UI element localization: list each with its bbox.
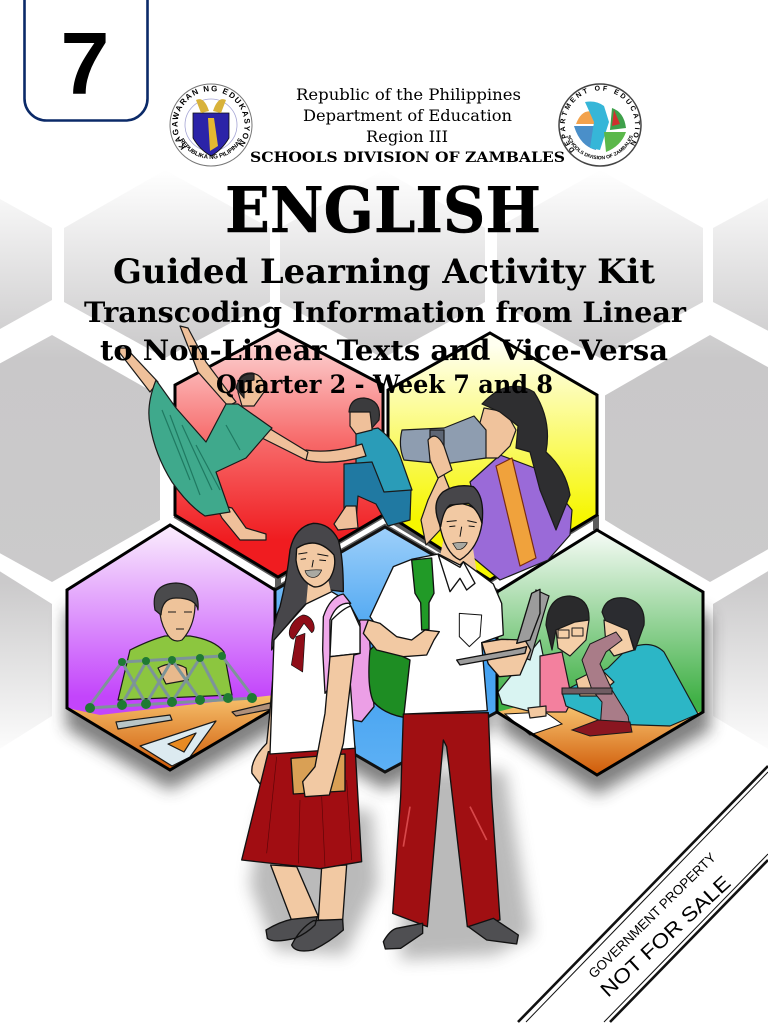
hair (272, 523, 343, 650)
shoes (383, 918, 518, 949)
face (296, 543, 335, 587)
grade number: 7 (61, 14, 109, 113)
ribbon (289, 615, 314, 672)
skirt (242, 746, 362, 869)
folder (291, 754, 345, 794)
header text: agency lines: SCHOOLS DIVISION OF ZAMBALES (250, 150, 565, 166)
dark connector lines (175, 515, 597, 715)
boy with bridge model (85, 583, 272, 766)
sleeve (330, 606, 360, 657)
shoes (266, 917, 343, 951)
grade level tab (24, 0, 148, 120)
banner large text: NOT FOR SALE (597, 872, 735, 1002)
hexagon: blue centre (275, 527, 497, 772)
smile (305, 570, 322, 577)
girl with glasses (498, 596, 589, 718)
blouse (270, 592, 360, 754)
quarter and week label: Quarter 2 - Week 7 and 8 (216, 370, 553, 399)
eyes and brows (298, 553, 328, 567)
boy in teal hoodie (562, 598, 698, 726)
pocket (459, 613, 482, 647)
pliers on table (232, 703, 272, 716)
student: girl (242, 523, 374, 951)
government property banner (518, 766, 768, 1022)
ruler on table (116, 715, 172, 729)
tablet held up (519, 590, 549, 660)
backpack (345, 620, 374, 722)
banner small text: GOVERNMENT PROPERTY (586, 850, 719, 981)
arm gripping strap (363, 620, 439, 657)
subtitle: Guided Learning Activity Kit: Guided Learning Activity Kit (113, 252, 655, 292)
dancers (116, 326, 412, 540)
smile (453, 542, 467, 550)
logo: Schools Division of Zambales seal: SCHOOLS DIVISION OF ZAMBALES (567, 135, 633, 160)
photographer (400, 386, 572, 580)
bridge model (88, 656, 254, 708)
set square on table (140, 721, 216, 766)
right arm (303, 654, 354, 797)
header text: agency lines (250, 86, 565, 166)
shirt (370, 554, 503, 714)
background hexagon pattern (0, 170, 768, 780)
male dancer (306, 398, 412, 530)
female dancer (116, 326, 308, 540)
left arm (252, 680, 283, 788)
header text: agency lines: Region III (366, 128, 448, 146)
logo: Department of Education seal: REPUBLIKA NG PILIPINAS (180, 138, 242, 159)
forearm holding tablet (482, 639, 531, 677)
face (439, 503, 482, 560)
backpack (369, 620, 427, 717)
pants (393, 713, 500, 927)
topic heading line two: to Non-Linear Texts and Vice-Versa (100, 334, 668, 367)
backpack strap (412, 558, 434, 630)
eyes and brows (447, 521, 477, 537)
backpack strap (323, 594, 351, 693)
legs (271, 865, 347, 925)
hexagon: yellow photography scene (388, 333, 597, 580)
hexagon: purple engineering scene (67, 525, 275, 770)
neck (306, 580, 332, 606)
logo: Schools Division of Zambales seal: DEPARTMENT OF EDUCATION (560, 86, 640, 153)
collar (438, 555, 475, 592)
hair (436, 486, 483, 527)
topic heading line one: Transcoding Information from Linear (84, 296, 687, 329)
table and paper (497, 706, 703, 775)
header text: agency lines: Department of Education (303, 107, 512, 125)
white gutters between hexagons (60, 322, 710, 782)
tablet (457, 589, 540, 665)
logo: Department of Education seal: KAGAWARAN NG EDUKASYON (172, 86, 250, 150)
title: ENGLISH: ENGLISH (225, 173, 541, 247)
shadows below lower hexagons (66, 560, 710, 795)
student: boy (363, 486, 540, 949)
microscope (562, 632, 632, 736)
hexagon: green science scene (497, 530, 703, 775)
shadows under the students (250, 770, 532, 960)
header text: agency lines: Republic of the Philippines (296, 86, 521, 104)
neck (438, 540, 477, 572)
hexagon: red dance scene (175, 330, 383, 577)
table (67, 695, 275, 770)
